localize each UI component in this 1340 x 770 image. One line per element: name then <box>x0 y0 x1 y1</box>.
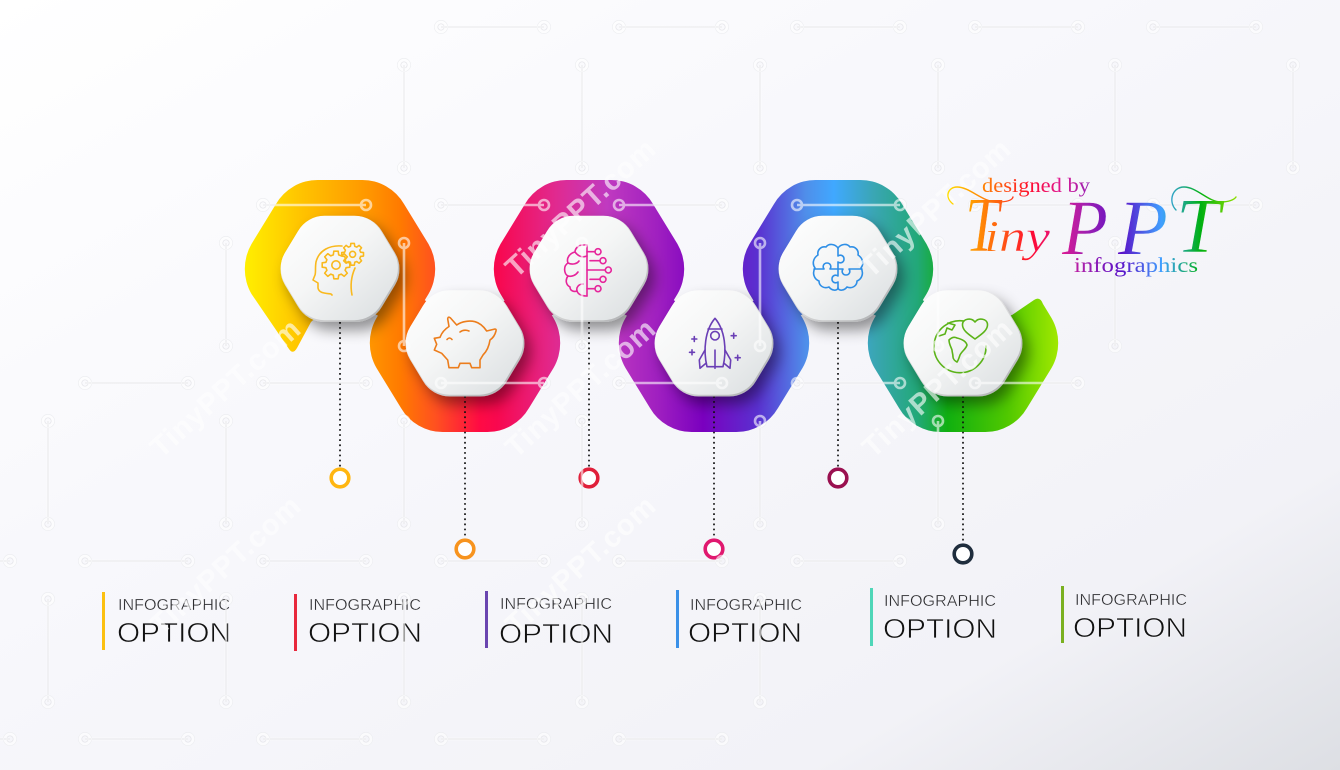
logo: designed by Tiny PPT infographics: designed by <box>982 175 1090 197</box>
option label 5: OPTION <box>883 613 997 644</box>
hexagon 2 <box>406 290 524 397</box>
icon: puzzle brain <box>813 244 863 290</box>
hexagon 1 <box>281 216 399 322</box>
watermarks: TinyPPT.com <box>144 490 307 641</box>
option label 1 <box>102 592 231 650</box>
watermarks: TinyPPT.com <box>854 133 1017 284</box>
icon: piggy bank <box>434 317 496 368</box>
watermarks: TinyPPT.com <box>856 313 1019 464</box>
option label 5: INFOGRAPHIC <box>884 593 996 610</box>
icon: rocket <box>690 318 740 368</box>
option label 2 <box>294 594 422 651</box>
option label 3: INFOGRAPHIC <box>500 596 612 613</box>
logo: designed by Tiny PPT infographics <box>948 175 1236 277</box>
hexagon 3 <box>530 216 648 322</box>
logo: designed by Tiny PPT infographics: P <box>1117 184 1168 271</box>
marker circle 2 <box>456 540 474 558</box>
dotted connector lines <box>340 322 963 544</box>
marker circle 6 <box>954 545 972 563</box>
marker circle 3 <box>580 469 598 487</box>
option label 5 <box>870 588 997 646</box>
logo: designed by Tiny PPT infographics: P <box>1061 184 1108 271</box>
hexagon 5 <box>779 216 897 322</box>
marker circle 1 <box>331 469 349 487</box>
option label 4 <box>676 590 802 648</box>
option label 1: INFOGRAPHIC <box>118 597 230 614</box>
watermarks: TinyPPT.com <box>499 490 662 641</box>
marker circle 4 <box>705 540 723 558</box>
option label 3: OPTION <box>499 618 613 649</box>
option label 6: INFOGRAPHIC <box>1075 592 1187 609</box>
watermarks: TinyPPT.com <box>144 313 307 464</box>
option label 4: INFOGRAPHIC <box>690 597 802 614</box>
watermarks: TinyPPT.com <box>499 313 662 464</box>
logo: designed by Tiny PPT infographics: T <box>965 181 1003 268</box>
marker circle 5 <box>829 469 847 487</box>
icon: brain with circuit <box>565 245 611 296</box>
option label 3 <box>485 591 613 649</box>
option label 2: OPTION <box>308 617 422 648</box>
option label 4: OPTION <box>688 617 802 648</box>
option label 6: OPTION <box>1073 612 1187 643</box>
option label 6 <box>1061 586 1187 643</box>
hexagon 4 <box>655 290 773 397</box>
logo: designed by Tiny PPT infographics: iny <box>984 212 1051 261</box>
option label 1: OPTION <box>117 617 231 648</box>
icon: globe with heart <box>934 319 988 373</box>
watermarks <box>144 133 1019 641</box>
logo: designed by Tiny PPT infographics: T <box>1176 182 1225 269</box>
hexagon 6 <box>904 290 1022 397</box>
icon: head with gears <box>313 243 364 295</box>
watermarks: TinyPPT.com <box>499 133 662 284</box>
logo: designed by Tiny PPT infographics: infographics <box>1074 253 1198 277</box>
ribbon: continuous rainbow band <box>245 180 1058 432</box>
option label 2: INFOGRAPHIC <box>309 597 421 614</box>
